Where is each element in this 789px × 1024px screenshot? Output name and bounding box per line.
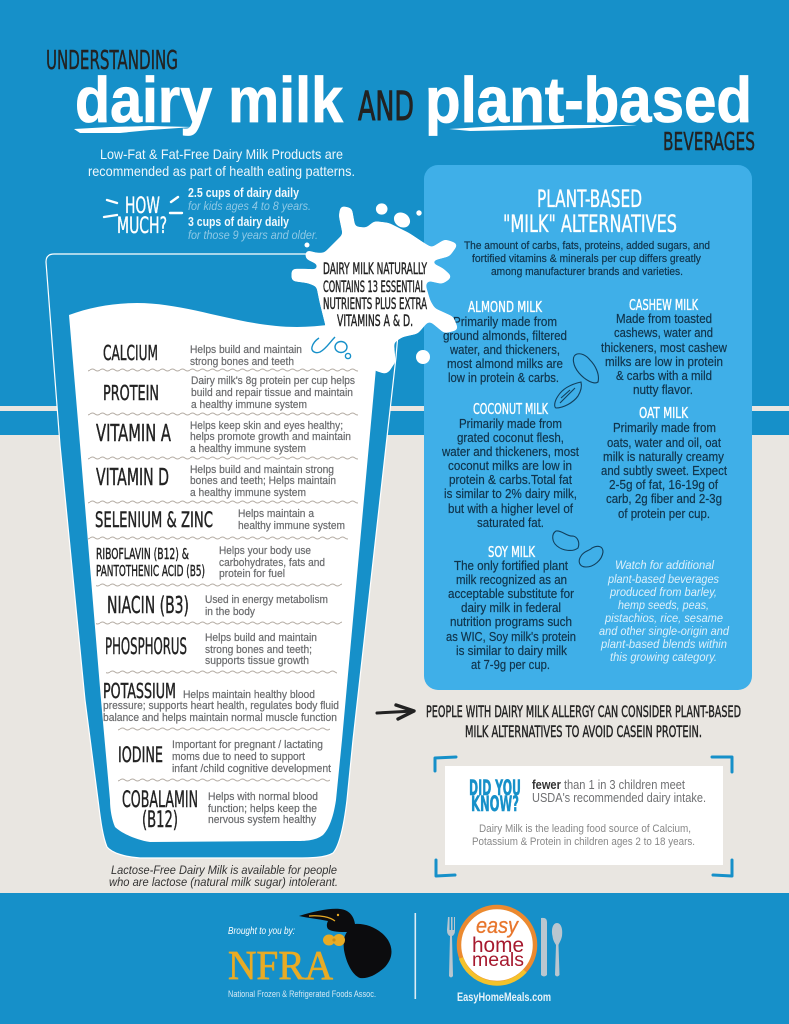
coconut milk: protein & carbs.Total fat [449,472,572,487]
panel intro [464,240,710,278]
splash text: VITAMINS A & D. [337,311,413,330]
cashew milk [601,296,728,397]
panel intro: The amount of carbs, fats, proteins, added sugars, and [464,240,710,252]
how much callout: 3 cups of dairy daily [188,215,289,229]
oat milk: carb, 2g fiber and 2-3g [606,491,722,506]
soy milk: is similar to dairy milk [456,643,567,658]
soy milk: The only fortified plant [454,558,568,573]
how much callout: for kids ages 4 to 8 years. [188,199,311,213]
row: iodine: moms due to need to support [172,751,305,763]
icon: almonds [555,354,598,408]
almond milk: ALMOND MILK [468,298,543,316]
row: vitamin a: a healthy immune system [190,443,306,455]
row: cobalamin [122,788,318,833]
oat milk: Primarily made from [613,420,716,435]
oat milk: OAT MILK [639,404,689,422]
logo: NFRA [228,909,391,1000]
row: riboflavin and pantothenic acid: carbohydrates, fats and [219,557,325,569]
icon: knife [541,918,547,976]
row: niacin [107,593,328,619]
splash text: CONTAINS 13 ESSENTIAL [323,277,425,296]
row: vitamin a: VITAMIN A [96,421,171,447]
splash text: NUTRIENTS PLUS EXTRA [323,294,427,313]
row: phosphorus: strong bones and teeth; [205,644,312,656]
coconut milk: is similar to 2% dairy milk, [444,486,577,501]
coconut milk: Primarily made from [459,416,562,431]
coconut milk: COCONUT MILK [473,400,549,418]
row: cobalamin: Helps with normal blood [208,791,318,803]
watch note: Watch for additional [615,558,714,572]
row: selenium and zinc: SELENIUM & ZINC [95,508,213,532]
footer divider [414,913,416,999]
row: potassium: Helps maintain healthy blood [183,689,315,701]
almond milk: water, and thickeners, [449,342,560,357]
row: iodine: Important for pregnant / lactating [172,739,323,751]
panel: plant-based alternatives [424,165,752,690]
row: vitamin d: bones and teeth; Helps maintain [190,475,336,487]
how much callout: HOW [125,194,160,219]
cashew milk: & carbs with a mild [616,368,712,383]
did you know heading [469,776,521,816]
row: potassium: POTASSIUM [103,679,176,703]
row: calcium: CALCIUM [103,341,158,365]
splash text [323,259,427,330]
oat milk: of protein per cup. [618,506,710,521]
watch note [599,558,729,664]
soy milk: dairy milk in federal [461,600,561,615]
oat milk: milk is naturally creamy [603,449,724,464]
panel heading: PLANT-BASED [537,185,642,213]
row: niacin: in the body [205,606,255,618]
dividers [88,368,358,782]
almond milk: Primarily made from [453,314,557,329]
row: vitamin d: VITAMIN D [96,465,169,491]
coconut milk [441,400,579,530]
splash text: DAIRY MILK NATURALLY [323,259,427,278]
logo: NFRA: NFRA [228,942,333,988]
row: riboflavin and pantothenic acid: RIBOFLAVIN (B12) & [96,545,189,563]
coconut milk: coconut milks are low in [448,458,572,473]
oat milk [601,404,727,521]
row: niacin: NIACIN (B3) [107,593,189,619]
cashew milk: thickeners, most cashew [601,340,728,355]
row: potassium [103,679,339,724]
row: calcium: strong bones and teeth [190,356,294,368]
row: cobalamin: COBALAMIN [122,788,198,813]
splash bubbles [312,337,351,359]
title: UNDERSTANDING [46,46,178,76]
cashew milk: Made from toasted [616,311,712,326]
row: vitamin d [96,464,336,499]
row: protein [103,375,355,411]
row: iodine: IODINE [118,743,163,767]
lactose note [109,865,338,889]
watch note: hemp seeds, peas, [618,598,709,612]
row: riboflavin and pantothenic acid: protein for fuel [219,568,285,580]
how much callout [104,186,318,242]
almond milk [443,298,567,385]
watch note: pistachios, rice, sesame [604,611,723,625]
row: riboflavin and pantothenic acid: Helps your body use [219,545,311,557]
icon: fork [447,917,455,978]
logo: NFRA: National Frozen & Refrigerated Foods Assoc. [228,989,376,1000]
row: niacin: Used in energy metabolism [205,594,328,606]
row: vitamin a [96,420,351,455]
logo: easy home meals: home [472,934,524,957]
row: protein: PROTEIN [103,381,159,405]
logo: easy home meals: meals [472,950,524,971]
lactose note: who are lactose (natural milk sugar) intolerant. [109,877,338,889]
row: vitamin a: Helps keep skin and eyes healthy; [190,420,343,432]
row: vitamin d: a healthy immune system [190,487,306,499]
row: phosphorus: supports tissue growth [205,655,309,667]
glass milk fill [69,303,377,842]
did you know heading: KNOW? [471,792,519,816]
logo: easy home meals [447,907,562,1004]
row: protein: build and repair tissue and maintain [191,387,353,399]
row: vitamin d: Helps build and maintain strong [190,464,334,476]
row: riboflavin and pantothenic acid: PANTOTHENIC ACID (B5) [96,562,205,580]
row: phosphorus: Helps build and maintain [205,632,317,644]
panel heading [503,185,677,238]
how much callout: for those 9 years and older. [188,228,318,242]
logo: NFRA: Brought to you by: [228,925,295,937]
almond milk: low in protein & carbs. [448,370,559,385]
arrow [377,705,414,719]
coconut milk: saturated fat. [477,515,544,530]
panel heading: "MILK" ALTERNATIVES [503,210,677,238]
glass of milk [46,254,405,858]
brackets [435,757,732,876]
row: selenium and zinc: Helps maintain a [238,508,315,520]
row: iodine [118,739,331,775]
icon: spoon [552,923,562,976]
row: riboflavin and pantothenic acid [96,545,325,580]
watch note: produced from barley, [609,585,717,599]
soy milk: acceptable substitute for [448,586,575,601]
coconut milk: grated coconut flesh, [457,430,564,445]
row: vitamin a: helps promote growth and maintain [190,431,351,443]
soy milk: as WIC, Soy milk's protein [446,629,576,644]
did you know text: fewer than 1 in 3 children meet [532,778,685,792]
row: calcium [103,341,302,368]
allergy note [426,702,741,741]
row: calcium: Helps build and maintain [190,344,302,356]
did you know heading: DID YOU [469,776,521,800]
icon: penguin [299,909,391,978]
almond milk: ground almonds, filtered [443,328,567,343]
coconut milk: but with a higher level of [448,501,573,516]
almond milk: most almond milks are [447,356,563,371]
row: potassium: pressure; supports heart health, regulates body fluid [103,700,339,712]
logo: easy home meals: easy [476,913,520,938]
intro text [88,146,355,179]
row: phosphorus [105,632,317,667]
watch note: plant-based beverages [607,572,719,586]
cashew milk: cashews, water and [614,325,713,340]
row: cobalamin: (B12) [142,808,178,833]
did you know text: USDA's recommended dairy intake. [532,791,706,805]
milk splash callout [292,203,456,373]
cashew milk: nutty flavor. [633,382,693,397]
row: iodine: infant /child cognitive development [172,763,331,775]
oat milk: and subtly sweet. Expect [601,463,727,478]
watch note: plant-based blends within [600,637,727,651]
row: cobalamin: nervous system healthy [208,814,316,826]
did you know text: Potassium & Protein in children ages 2 to 18 years. [472,836,695,848]
row: selenium and zinc [95,508,345,532]
soy milk: SOY MILK [488,543,536,561]
oat milk: oats, water and oil, oat [607,435,721,450]
soy milk: milk recognized as an [456,572,567,587]
row: selenium and zinc: healthy immune system [238,520,345,532]
intro text: recommended as part of health eating patterns. [88,163,355,179]
row: protein: Dairy milk's 8g protein per cup helps [191,375,355,387]
soy milk [446,543,576,672]
icon: soy beans [553,531,603,567]
panel intro: fortified vitamins & minerals per cup differs greatly [472,253,701,265]
title: AND [358,84,414,130]
watch note: and other single-origin and [599,624,729,638]
lactose note: Lactose-Free Dairy Milk is available for people [111,865,337,877]
did you know box [435,757,732,876]
oat milk: 2-5g of fat, 16-19g of [609,477,718,492]
plate [459,907,535,983]
how much callout: 2.5 cups of dairy daily [188,186,299,200]
title: plant-based [425,64,752,136]
cashew milk: CASHEW MILK [629,296,699,314]
soy milk: nutrition programs such [450,614,572,629]
intro text: Low-Fat & Fat-Free Dairy Milk Products are [100,146,343,162]
row: cobalamin: function; helps keep the [208,803,317,815]
row: phosphorus: PHOSPHORUS [105,635,187,660]
soy milk: at 7-9g per cup. [471,657,550,672]
title [46,46,755,156]
did you know text [472,778,706,848]
did you know text: Dairy Milk is the leading food source of Calcium, [479,823,691,835]
cashew milk: milks are low in protein [605,354,723,369]
title: dairy milk [75,64,343,136]
panel intro: among manufacturer brands and varieties. [491,266,683,278]
row: potassium: balance and helps maintain normal muscle function [103,712,337,724]
row: protein: a healthy immune system [191,399,307,411]
coconut milk: water and thickeners, most [441,444,579,459]
how much callout: MUCH? [117,214,167,239]
logo: easy home meals: EasyHomeMeals.com [457,992,551,1004]
watch note: this growing category. [610,650,717,664]
